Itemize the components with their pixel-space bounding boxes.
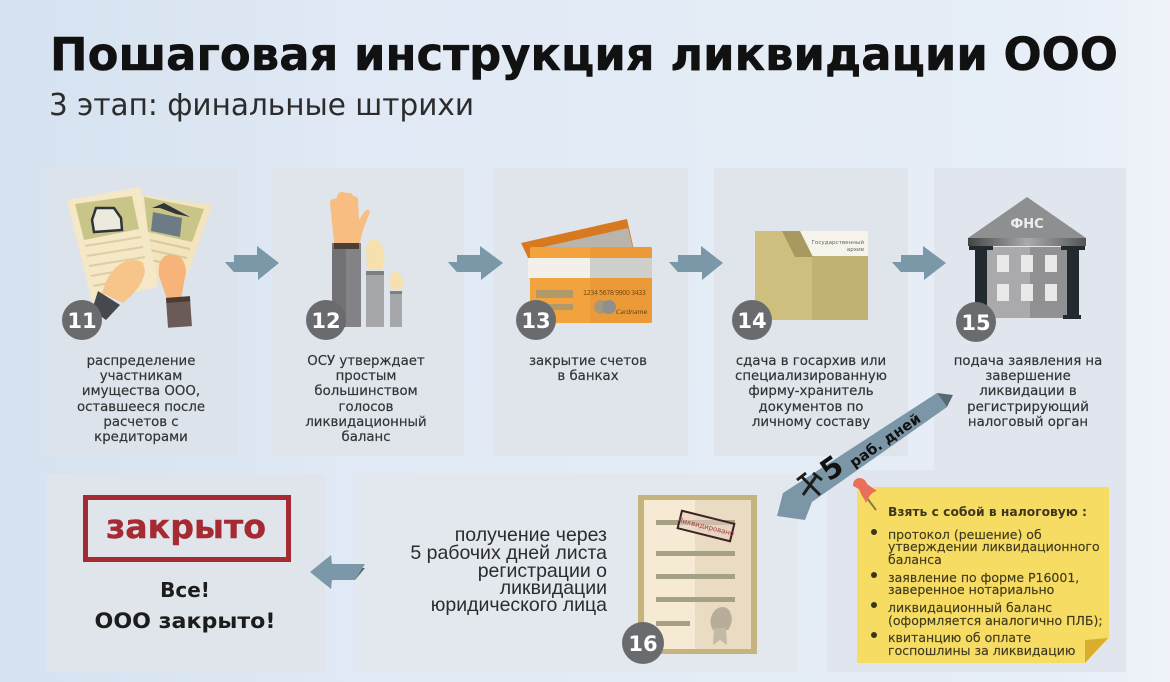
icon: raised hands	[330, 192, 404, 327]
icon: tax office building	[968, 197, 1086, 319]
panel: step 14	[714, 168, 908, 456]
icon: bank cards: 1234 5678 9900 3433	[583, 289, 646, 297]
step 11 text: кредиторами	[94, 430, 188, 445]
step 14 text: документов по	[759, 400, 863, 415]
closing message: Все!	[160, 578, 210, 602]
note list: баланса	[888, 552, 942, 567]
step 15 text: ликвидации в	[979, 384, 1077, 399]
panel: what to bring	[827, 470, 1126, 672]
note list: ликвидационный баланс	[888, 600, 1052, 615]
step 16 text: регистрации о	[478, 560, 607, 582]
deadline label: 5	[814, 448, 850, 488]
icon: registration certificate: Ликвидировано	[677, 516, 735, 538]
step 12 text	[305, 354, 427, 445]
stamp: closed	[86, 498, 288, 560]
step 13 text: закрытие счетов	[529, 354, 647, 369]
step 11 text: распределение	[87, 354, 195, 369]
note list: протокол (решение) об	[888, 527, 1042, 542]
step 15 text	[954, 354, 1102, 430]
step 14 text: личному составу	[752, 415, 870, 430]
arrow 16 to closed	[310, 555, 365, 589]
step 12 text: большинством	[314, 383, 418, 399]
step 12 text: ликвидационный	[305, 415, 427, 430]
note list: (оформляется аналогично ПЛБ);	[888, 613, 1103, 628]
note list: квитанцию об оплате	[888, 630, 1031, 645]
badge 16	[622, 622, 664, 664]
arrow 11 to 12	[225, 246, 279, 280]
panel: step 16	[355, 474, 797, 672]
panel: step 13	[494, 168, 688, 456]
icon: bank cards	[521, 219, 652, 323]
arrow 14 to 15	[892, 246, 946, 280]
panel: result closed	[47, 474, 325, 672]
step 11 text: оставшееся после	[77, 400, 205, 415]
panel: step 11	[46, 168, 238, 456]
deadline label	[814, 411, 924, 488]
subtitle: 3 этап: финальные штрихи	[49, 88, 474, 123]
step 14 text: сдача в госархив или	[736, 354, 886, 369]
icon: crossed hammers	[797, 473, 822, 495]
step 12 text: простым	[336, 369, 396, 384]
step 16 text: юридического лица	[431, 594, 607, 616]
note list: заявление по форме Р16001,	[888, 570, 1079, 585]
closing message	[94, 578, 276, 633]
sticky note	[857, 487, 1109, 663]
step 16 text: ликвидации	[500, 577, 607, 599]
badge 13	[516, 300, 556, 340]
step 14 text: фирму-хранитель	[748, 384, 874, 399]
icon: tax office building: ФНС	[1010, 217, 1044, 232]
icon: push pin	[853, 478, 877, 510]
badge 15: 15	[961, 311, 991, 335]
step 15 text: налоговый орган	[968, 415, 1088, 430]
panel: step 12	[272, 168, 464, 456]
arrow 13 to 14	[669, 246, 723, 280]
step 15 text: подача заявления на	[954, 354, 1102, 369]
note list	[871, 527, 1103, 658]
step 12 text: голосов	[338, 400, 394, 415]
badge 11	[62, 300, 102, 340]
badge 16: 16	[628, 632, 658, 656]
panel: step 15	[934, 168, 1126, 472]
icon: archive folder: архив	[847, 247, 864, 253]
deadline label: раб. дней	[847, 411, 924, 471]
badge 11: 11	[67, 309, 97, 333]
arrow 12 to 13	[448, 246, 503, 280]
icon: bank cards: Cardname	[616, 309, 647, 316]
icon: property documents and hands	[67, 187, 212, 328]
step 15 text: завершение	[985, 369, 1071, 384]
step 11 text: участникам	[100, 369, 182, 384]
step 16 text: получение через	[455, 524, 607, 546]
step 12 text: ОСУ утверждает	[307, 354, 425, 369]
step 13 text	[529, 354, 647, 384]
badge 14	[732, 300, 772, 340]
badge 12	[306, 300, 346, 340]
step 11 text	[77, 354, 205, 445]
badge 12: 12	[311, 309, 341, 333]
note list: утверждении ликвидационного	[888, 539, 1100, 554]
note list: госпошлины за ликвидацию	[888, 643, 1075, 658]
badge 15	[956, 302, 996, 342]
step 12 text: баланс	[342, 429, 390, 445]
step 16 text: 5 рабочих дней листа	[410, 542, 607, 564]
badge 13: 13	[521, 309, 551, 333]
step 15 text: регистрирующий	[967, 400, 1089, 415]
badge 14: 14	[737, 309, 767, 333]
icon: archive folder: Государственный	[811, 239, 864, 246]
closing message: ООО закрыто!	[94, 609, 276, 633]
long arrow with deadline	[777, 393, 953, 520]
title: Пошаговая инструкция ликвидации ООО	[50, 28, 1118, 81]
icon: archive folder	[755, 231, 868, 320]
icon: registration certificate	[638, 495, 757, 654]
note list: заверенное нотариально	[888, 582, 1054, 597]
note heading: Взять с собой в налоговую :	[888, 505, 1087, 519]
step 11 text: имущества ООО,	[82, 384, 200, 399]
step 13 text: в банках	[557, 368, 619, 384]
step 14 text	[735, 354, 887, 430]
step 16 text	[410, 524, 607, 616]
step 14 text: специализированную	[735, 369, 887, 384]
stamp: closed: закрыто	[106, 507, 266, 546]
step 11 text: расчетов с	[103, 415, 179, 430]
